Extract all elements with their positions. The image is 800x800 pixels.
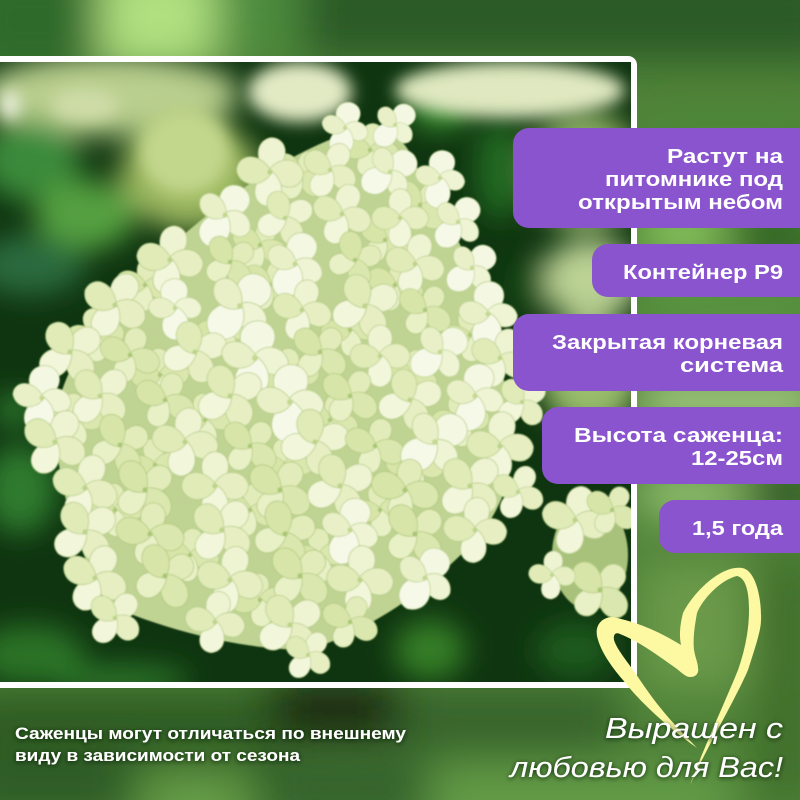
white photo frame bbox=[0, 56, 637, 688]
label: age: 1,5 года bbox=[692, 517, 784, 540]
slogan: grown with love: любовью для Вас! bbox=[508, 752, 783, 784]
label: root system bbox=[513, 314, 800, 391]
label: grown outdoors bbox=[513, 128, 800, 228]
photo contents bbox=[0, 55, 649, 694]
label: root system: система bbox=[680, 354, 784, 377]
note: seedlings may differ by season: Саженцы могут отличаться по внешнему bbox=[15, 725, 407, 743]
label: age bbox=[659, 500, 800, 553]
label: seedling height bbox=[542, 407, 800, 484]
label: container: Контейнер Р9 bbox=[623, 261, 783, 284]
label: root system: Закрытая корневая bbox=[552, 331, 783, 354]
icon: hand-drawn yellow heart bbox=[597, 568, 761, 785]
hydrangea panicle bbox=[5, 93, 560, 691]
slogan: grown with love bbox=[508, 713, 784, 784]
label: seedling height: Высота саженца: bbox=[574, 424, 783, 447]
label: grown outdoors: Растут на bbox=[667, 145, 784, 168]
label: grown outdoors: открытым небом bbox=[578, 191, 783, 214]
top layer of florets bbox=[5, 93, 560, 691]
note: seedlings may differ by season: виду в зависимости от сезона bbox=[15, 747, 301, 765]
label: seedling height: 12-25см bbox=[691, 447, 783, 470]
note: seedlings may differ by season bbox=[15, 725, 407, 765]
under layer of florets bbox=[46, 117, 499, 627]
label: container bbox=[592, 244, 800, 297]
label: grown outdoors: питомнике под bbox=[605, 168, 783, 191]
info labels bbox=[513, 128, 800, 553]
panel: hydrangea photo with white frame bbox=[0, 55, 649, 694]
slogan: grown with love: Выращен с bbox=[605, 713, 784, 745]
side hydrangea, lower right bbox=[528, 485, 631, 618]
